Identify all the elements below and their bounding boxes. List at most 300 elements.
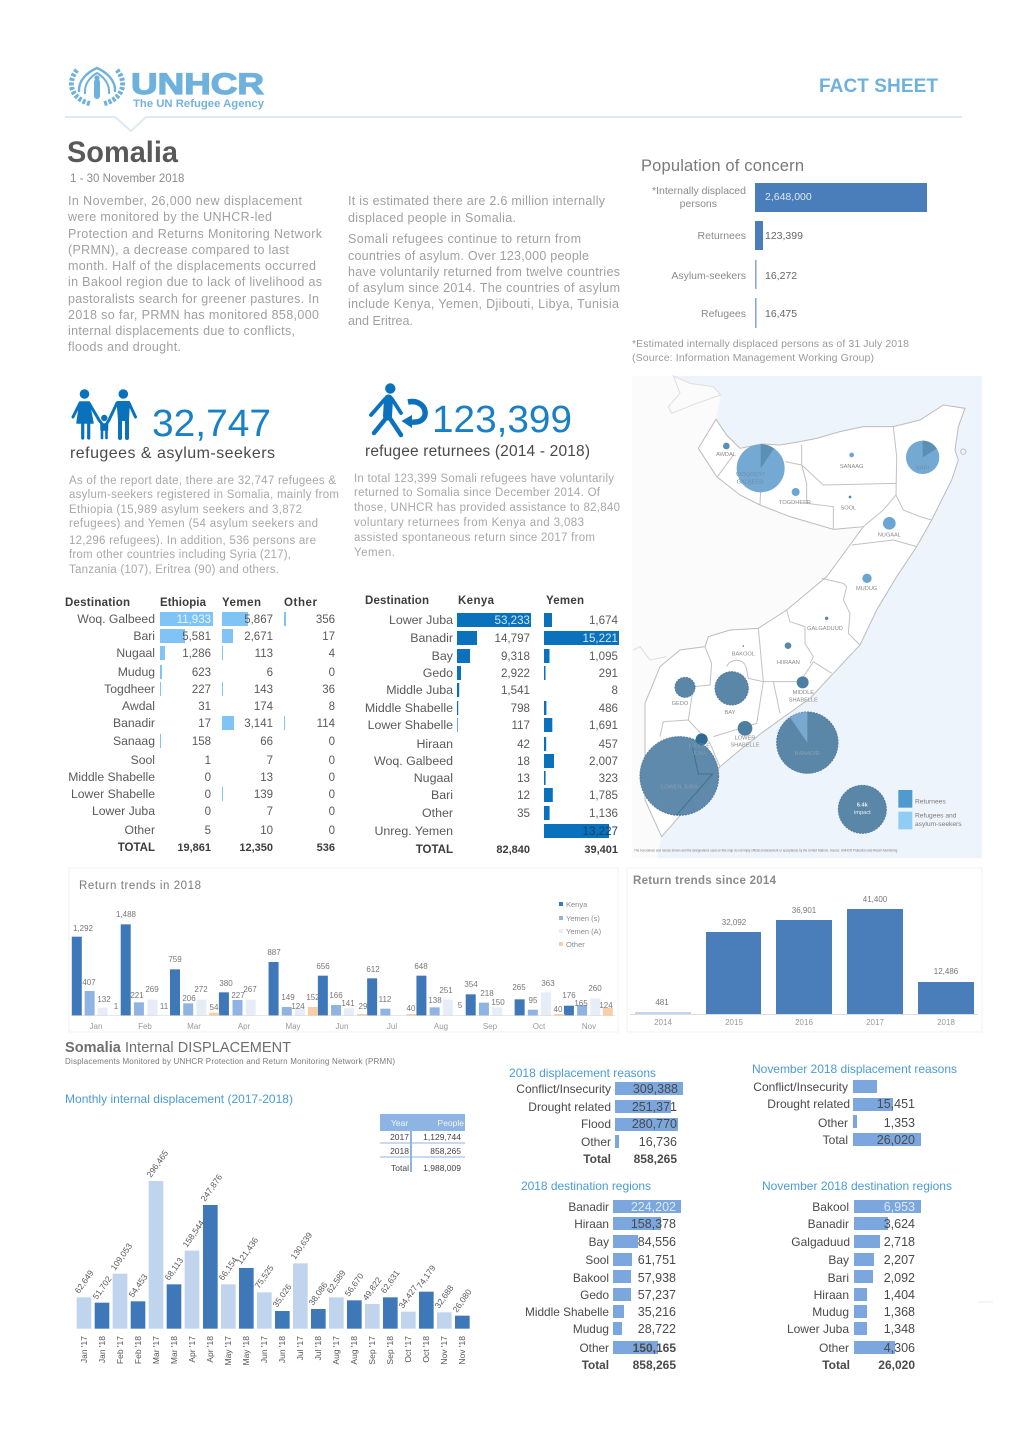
data labels: 206: [182, 994, 196, 1003]
row labels: Sool: [585, 1253, 609, 1267]
footnote: *Estimated internally displaced persons as of 31 July 2018: [632, 338, 909, 350]
data labels: 11: [160, 1002, 169, 1011]
Ethiopia values: 227: [192, 684, 211, 696]
map: disclaimer: The boundaries and names shown and the designations used on this map do not imply official endorsement or acceptance by the United Nations. Source: UNHCR Protection and Return Monitoring: [634, 849, 897, 853]
value labels: 49,822: [360, 1275, 384, 1302]
row labels: Awdal: [122, 699, 155, 713]
row labels: Lower Juba: [389, 613, 453, 627]
row labels: Conflict/Insecurity: [516, 1082, 611, 1096]
map: region labels: BARI: [916, 465, 930, 471]
data labels: 40: [554, 1005, 563, 1014]
map: region labels: JUBA: [692, 751, 707, 757]
data labels: 1: [114, 1002, 119, 1011]
data labels: 40: [407, 1004, 416, 1013]
month axis: Oct: [533, 1022, 546, 1031]
value labels: 62,589: [324, 1268, 348, 1295]
values: 4,306: [884, 1341, 915, 1355]
table: yearly displacement totals: 1,988,009: [423, 1163, 461, 1173]
in-cell bars: [615, 1082, 683, 1148]
data labels: 612: [366, 965, 380, 974]
title: Somalia: [67, 136, 178, 169]
Yemen values: 1,674: [589, 614, 619, 627]
month axis: May: [285, 1022, 301, 1031]
value labels: 62,649: [72, 1268, 96, 1295]
data labels: 149: [281, 993, 295, 1002]
row labels: Other: [818, 1116, 848, 1130]
icon: UNHCR wreath and sheltering hands: [71, 68, 123, 104]
value labels: 38,086: [306, 1280, 330, 1307]
values: 61,751: [638, 1253, 676, 1267]
value labels: 296,465: [144, 1148, 170, 1179]
row labels: Mudug: [573, 1322, 609, 1336]
big number: 32,747: [152, 403, 271, 445]
data labels: 1,292: [73, 924, 94, 933]
text block: Tanzania (107), Eritrea (90) and others.: [69, 564, 279, 576]
value labels: 247,876: [198, 1172, 224, 1203]
Kenya values: 798: [511, 702, 530, 715]
map: region labels: [661, 452, 930, 790]
bar chart: monthly displacement 2017 vs 2018: [72, 1148, 474, 1366]
row labels: Nugaal: [116, 646, 155, 660]
Yemen values: 10: [260, 825, 273, 837]
panel: population of concern: [632, 157, 927, 364]
map: colour legend: [898, 790, 962, 829]
table: refugees by destination and origin: [65, 597, 336, 854]
data labels: 54: [210, 1003, 219, 1012]
data labels: 218: [480, 989, 494, 998]
Yemen values: 2,007: [589, 755, 618, 768]
data labels: 124: [291, 1002, 305, 1011]
Yemen values: 1,691: [589, 719, 618, 732]
map: region labels: MIDDLE: [793, 690, 814, 696]
value labels: 54,453: [126, 1272, 150, 1299]
month labels: Jun '17: [259, 1336, 269, 1363]
text block: Ethiopia (15,989 asylum seekers and 3,872: [69, 504, 302, 516]
map: Somalia outline: [645, 405, 965, 837]
Yemen values: [239, 614, 274, 854]
Kenya values: 35: [517, 807, 530, 820]
heading: November 2018 destination regions: [762, 1179, 952, 1193]
data labels: 124: [599, 1001, 613, 1010]
values: 57,938: [638, 1271, 676, 1285]
values: [877, 1097, 915, 1147]
values: 35,216: [638, 1305, 676, 1319]
in-cell bars: [160, 612, 286, 801]
bar chart: 41,400: [863, 895, 888, 904]
map: region labels: BAKOOL: [732, 652, 755, 658]
legend: Yemen (s): [566, 914, 600, 923]
Yemen values: 143: [254, 684, 273, 696]
row labels: Mudug: [118, 665, 155, 679]
row labels: Banadir: [808, 1217, 849, 1231]
Yemen values: 13,227: [583, 825, 618, 838]
data labels: 354: [464, 980, 478, 989]
Kenya values: 1,541: [501, 684, 530, 697]
map: colour legend: Refugees and: [915, 813, 957, 820]
value labels: 32,688: [432, 1283, 456, 1310]
Yemen values: 1,095: [589, 650, 618, 663]
bar chart: 2016: [795, 1018, 813, 1027]
values: 16,736: [639, 1135, 677, 1149]
Kenya values: 18: [517, 755, 530, 768]
map: region labels: SOOL: [840, 505, 856, 511]
row labels: Total: [823, 1133, 848, 1147]
table: yearly displacement totals: Total: [391, 1163, 409, 1173]
column headers: Destination: [365, 595, 429, 607]
Yemen values: 5,867: [244, 614, 273, 626]
row labels: Lower Shabelle: [368, 718, 453, 732]
value labels: 68,113: [162, 1255, 185, 1282]
map: region labels: GEDO: [672, 701, 689, 707]
Yemen values: 139: [254, 789, 273, 801]
table: November 2018 destination regions: [762, 1179, 952, 1372]
row labels: Lower Juba: [787, 1322, 849, 1336]
month labels: Mar '17: [151, 1336, 161, 1364]
text block: internal displacement summary: [67, 194, 323, 354]
Yemen values: 3,141: [244, 718, 273, 730]
month labels: Sep '18: [385, 1336, 395, 1365]
row labels: Other: [579, 1341, 609, 1355]
row labels: Total: [822, 1358, 850, 1372]
row labels: Gedo: [580, 1288, 609, 1302]
value labels: 66,154: [216, 1255, 240, 1282]
data labels: 380: [219, 979, 233, 988]
month labels: Mar '18: [169, 1336, 179, 1364]
values: 2,207: [884, 1253, 915, 1267]
chart heading: monthly internal displacement: Monthly internal displacement (2017-2018): [65, 1092, 293, 1106]
bar chart: population groups: [652, 183, 927, 328]
Ethiopia values: 17: [198, 718, 211, 730]
map: region labels: MUDUG: [856, 586, 877, 592]
bar chart: [630, 895, 978, 1027]
row labels: Hiraan: [574, 1217, 609, 1231]
table: 2018 displacement reasons: [509, 1066, 683, 1166]
month labels: Oct '18: [421, 1336, 431, 1363]
stat caption: refugee returnees (2014 - 2018): [365, 443, 590, 460]
map: regional boundaries: [660, 427, 966, 767]
values: 158,378: [631, 1217, 676, 1231]
row labels: Bay: [589, 1235, 609, 1249]
logo tagline: The UN Refugee Agency: [133, 98, 265, 110]
fact sheet label: FACT SHEET: [819, 76, 938, 97]
heading: Return trends in 2018: [79, 880, 201, 892]
values: 858,265: [634, 1152, 677, 1166]
section heading: Somalia internal displacement: Somalia Internal DISPLACEMENT: [65, 1040, 291, 1056]
value labels: 158,544: [180, 1218, 206, 1249]
row labels: Drought related: [767, 1097, 850, 1111]
row labels: [68, 612, 155, 854]
table: returnees by destination and origin: [365, 595, 619, 856]
column headers: Yemen: [222, 597, 261, 609]
text block: internal displacement summary: pastoralists search for greener pastures. In: [68, 292, 319, 306]
value labels: 121,436: [234, 1235, 260, 1266]
text block: asylum-seekers registered in Somalia, mainly from: [69, 489, 339, 501]
Kenya values: 14,797: [495, 632, 530, 645]
Yemen values: 1,785: [589, 789, 618, 802]
column headers: Ethiopia: [160, 597, 207, 609]
bar chart: population groups: 16,475: [765, 308, 797, 320]
Ethiopia values: 11,933: [177, 614, 211, 626]
Other values: 36: [322, 684, 335, 696]
data labels: 363: [541, 979, 555, 988]
map: neighbouring land: [632, 376, 863, 858]
row labels: Other: [581, 1135, 611, 1149]
values: 3,624: [884, 1217, 915, 1231]
Ethiopia values: 19,861: [177, 842, 211, 854]
data labels: 132: [97, 995, 111, 1004]
text block: internal displacement summary: were monitored by the UNHCR-led: [67, 210, 272, 224]
Yemen values: 15,221: [583, 632, 618, 645]
data labels: 176: [562, 991, 576, 1000]
column headers: Other: [284, 597, 318, 609]
Ethiopia values: 31: [198, 701, 211, 713]
text block: IDPs and refugee returns: [348, 194, 620, 328]
month axis: Jun: [336, 1022, 348, 1031]
data labels: 152: [306, 993, 320, 1002]
row labels: Middle Shabelle: [68, 770, 155, 784]
Yemen values: 2,671: [244, 631, 273, 643]
text block: IDPs and refugee returns: have voluntarily returned from twelve countries: [348, 265, 620, 279]
row labels: Total: [583, 1152, 611, 1166]
row labels: Other: [422, 806, 453, 820]
Yemen values: 486: [599, 702, 618, 715]
text block: those, UNHCR has provided assistance to 82,840: [354, 502, 620, 514]
column headers: Kenya: [458, 595, 495, 607]
bar chart: 36,901: [792, 906, 817, 915]
map: region labels: WOQOOYI: [736, 472, 765, 478]
table: yearly displacement totals: 2017: [390, 1132, 409, 1142]
data labels: 648: [414, 962, 428, 971]
month labels: May '18: [241, 1336, 251, 1366]
row labels: Bay: [828, 1253, 849, 1267]
text block: IDPs and refugee returns: displaced people in Somalia.: [348, 211, 516, 225]
month labels: Oct '17: [403, 1336, 413, 1363]
text block: As of the report date, there are 32,747 refugees &: [69, 475, 336, 487]
value labels: 56,670: [342, 1271, 366, 1298]
legend: Yemen (A): [566, 927, 602, 936]
bar chart: 2018: [937, 1018, 955, 1027]
row labels: Other: [125, 823, 155, 837]
Other values: 0: [329, 806, 335, 818]
text block: from other countries including Syria (217),: [69, 549, 291, 561]
Other values: 0: [329, 667, 335, 679]
map: region labels: GALBEED: [737, 479, 763, 485]
heading: 2018 displacement reasons: [509, 1066, 656, 1080]
Kenya values: 12: [517, 789, 530, 802]
Kenya values: 82,840: [496, 844, 530, 856]
Yemen values: 1,136: [589, 807, 618, 820]
data labels: 150: [491, 998, 505, 1007]
map: region labels: HIIRAAN: [777, 660, 800, 666]
footnote: [632, 338, 909, 364]
Ethiopia values: 0: [205, 772, 211, 784]
data labels: 887: [267, 948, 281, 957]
table: yearly displacement totals: 2018: [390, 1146, 409, 1156]
data labels: 112: [379, 995, 392, 1004]
month axis: Apr: [238, 1022, 251, 1031]
Other values: [316, 614, 336, 854]
data labels: 5: [458, 1001, 463, 1010]
data labels: 267: [243, 985, 257, 994]
bar chart: population groups: *Internally displaced: [652, 185, 746, 197]
month axis: [90, 1022, 596, 1031]
row labels: Nugaal: [414, 771, 453, 785]
Yemen values: 291: [599, 667, 618, 680]
row labels: Bakool: [812, 1200, 849, 1214]
value labels: [72, 1148, 474, 1314]
map: region labels: SHABELLE: [789, 697, 818, 703]
map: size legend: 6.4k: [857, 803, 869, 809]
text block: IDPs and refugee returns: and Eritrea.: [348, 314, 413, 328]
panel: map of returnees and refugees by region: [632, 376, 982, 858]
row labels: Bari: [133, 629, 155, 643]
month axis: Aug: [434, 1022, 448, 1031]
month labels: Aug '18: [349, 1336, 359, 1365]
month labels: Jan '17: [79, 1336, 89, 1363]
map: region labels: BAY: [725, 710, 736, 716]
row labels: Drought related: [528, 1100, 611, 1114]
bar chart: population groups: Asylum-seekers: [671, 270, 746, 282]
value labels: 130,639: [288, 1230, 314, 1261]
month axis: Feb: [138, 1022, 152, 1031]
header: UNHCR logo: [71, 68, 265, 110]
row labels: Total: [582, 1358, 609, 1372]
Yemen values: 6: [267, 667, 273, 679]
grouped bar chart: [71, 900, 615, 1031]
Other values: 17: [322, 631, 335, 643]
row labels: TOTAL: [118, 842, 155, 854]
value labels: 75,525: [252, 1263, 276, 1290]
stat caption: refugees & asylum-seekers: [70, 445, 275, 462]
text block: internal displacement summary: (PRMN), a decrease compared to last: [68, 243, 290, 257]
Yemen values: 323: [599, 772, 618, 785]
data labels: 138: [428, 996, 442, 1005]
text block: assisted spontaneous return since 2017 from: [354, 532, 595, 544]
row labels: Hiraan: [416, 737, 453, 751]
map: size legend: [838, 785, 886, 833]
row labels: Flood: [581, 1117, 611, 1131]
values: 1,404: [884, 1288, 915, 1302]
row labels: Bakool: [573, 1271, 609, 1285]
Other values: 0: [329, 755, 335, 767]
bar chart: population groups: 16,272: [765, 270, 797, 282]
row labels: Middle Shabelle: [525, 1305, 609, 1319]
map: region labels: TOGDHEER: [779, 500, 811, 506]
heading: November 2018 displacement reasons: [752, 1062, 957, 1076]
report date: 1 - 30 November 2018: [70, 173, 184, 185]
row labels: Hiraan: [814, 1288, 849, 1302]
values: 84,556: [638, 1235, 676, 1249]
map: region labels: LOWER: [735, 735, 755, 741]
row labels: Bay: [432, 649, 454, 663]
value labels: 34,427: [396, 1283, 420, 1310]
Yemen values: 8: [612, 684, 618, 697]
row labels: [753, 1080, 850, 1147]
text block: internal displacement summary: month. Half of the displacements occurred: [68, 259, 316, 273]
Yemen values: 174: [254, 701, 274, 713]
map: colour legend: asylum-seekers: [915, 821, 962, 828]
heading: Population of concern: [641, 157, 804, 175]
table: yearly displacement totals: Year: [391, 1118, 408, 1128]
data labels: 221: [130, 991, 144, 1000]
Ethiopia values: 1: [205, 755, 211, 767]
month axis: Jan: [90, 1022, 102, 1031]
Yemen values: 39,401: [584, 844, 618, 856]
month axis: Mar: [187, 1022, 201, 1031]
Ethiopia values: 5,581: [182, 631, 211, 643]
bar chart: population groups: Refugees: [701, 308, 746, 320]
month axis: Sep: [483, 1022, 498, 1031]
in-cell bars: [613, 1200, 681, 1354]
month labels: Jul '17: [295, 1336, 305, 1360]
values: 1,368: [884, 1305, 915, 1319]
legend: Other: [566, 940, 585, 949]
values: 28,722: [638, 1322, 676, 1336]
map: region labels: LOWER JUBA: [661, 784, 698, 790]
text block: internal displacement summary: In November, 26,000 new displacement: [68, 194, 303, 208]
table: yearly displacement totals: 858,265: [430, 1146, 461, 1156]
month labels: Feb '17: [115, 1336, 125, 1364]
values: 280,770: [632, 1117, 677, 1131]
bar chart: 2014: [654, 1018, 672, 1027]
values: 224,202: [631, 1200, 676, 1214]
header rule with notch: [65, 117, 962, 131]
text block: internal displacement summary: 2018 so far, PRMN has monitored 858,000: [68, 308, 319, 322]
values: 1,353: [884, 1116, 915, 1130]
bar chart: population groups: Returnees: [698, 230, 746, 242]
month labels: Jul '18: [313, 1336, 323, 1360]
table: yearly displacement totals: People: [438, 1118, 464, 1128]
text block: 12,296 refugees). In addition, 536 persons are: [69, 535, 316, 547]
text block: IDPs and refugee returns: Somali refugees continue to return from: [348, 232, 581, 246]
map: colour legend: Returnees: [915, 798, 946, 805]
Other values: 8: [329, 701, 335, 713]
Yemen values: 12,350: [239, 842, 273, 854]
Other values: 356: [316, 614, 335, 626]
column headers: [365, 595, 584, 607]
Ethiopia values: 0: [205, 806, 211, 818]
value labels: 35,026: [270, 1282, 294, 1309]
value labels: 26,080: [450, 1287, 474, 1314]
data labels: 95: [529, 996, 538, 1005]
values: 2,718: [884, 1235, 915, 1249]
row labels: [525, 1200, 609, 1372]
Other values: 0: [329, 789, 335, 801]
values: [632, 1082, 678, 1166]
month labels: Aug '17: [331, 1336, 341, 1365]
values: 1,348: [884, 1322, 915, 1336]
table: November 2018 displacement reasons: [752, 1062, 957, 1147]
Other values: 536: [317, 842, 335, 854]
data labels: 165: [574, 999, 588, 1008]
Yemen values: 457: [599, 738, 618, 751]
Yemen values: 113: [255, 648, 273, 660]
icon: refugee family: [73, 389, 136, 438]
Kenya values: 2,922: [501, 667, 530, 680]
panel: refugee returnees stat: [354, 383, 620, 559]
Kenya values: 42: [517, 738, 530, 751]
text block: In total 123,399 Somali refugees have voluntarily: [354, 473, 614, 485]
bar chart: 481: [655, 998, 669, 1007]
logo wordmark: UNHCR: [131, 68, 264, 101]
Ethiopia values: 5: [205, 825, 211, 837]
column headers: Yemen: [546, 595, 584, 607]
text block: returned to Somalia since December 2014. Of: [354, 487, 601, 499]
Ethiopia values: 158: [192, 736, 211, 748]
bar chart: 12,486: [934, 967, 959, 976]
data labels: 260: [588, 984, 602, 993]
map: region labels: BANADIR: [795, 751, 820, 757]
